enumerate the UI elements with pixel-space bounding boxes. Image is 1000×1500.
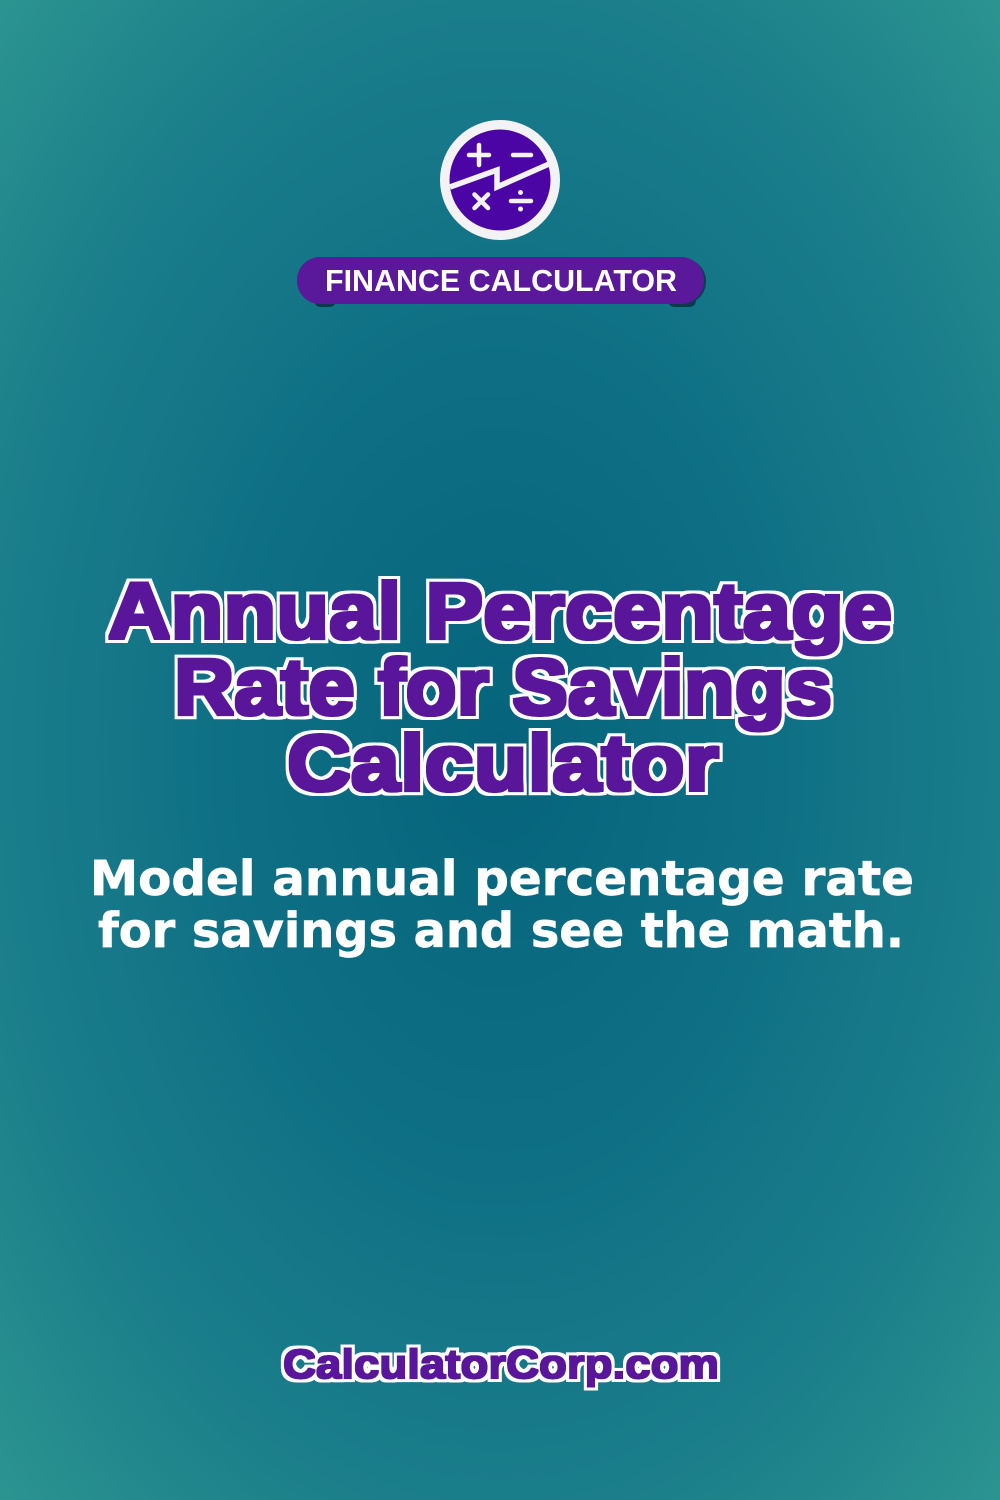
title	[108, 566, 892, 807]
title: Calculator	[287, 718, 719, 807]
category badge: FINANCE CALCULATOR	[325, 263, 677, 298]
category badge	[297, 257, 706, 307]
subtitle: Model annual percentage rate	[90, 851, 914, 907]
subtitle: for savings and see the math.	[98, 903, 904, 959]
subtitle	[90, 851, 914, 959]
title: Rate for Savings	[174, 642, 832, 731]
website url: CalculatorCorp.com	[283, 1341, 719, 1387]
title: Annual Percentage	[108, 566, 892, 655]
logo: calculator symbols icon	[440, 120, 560, 240]
